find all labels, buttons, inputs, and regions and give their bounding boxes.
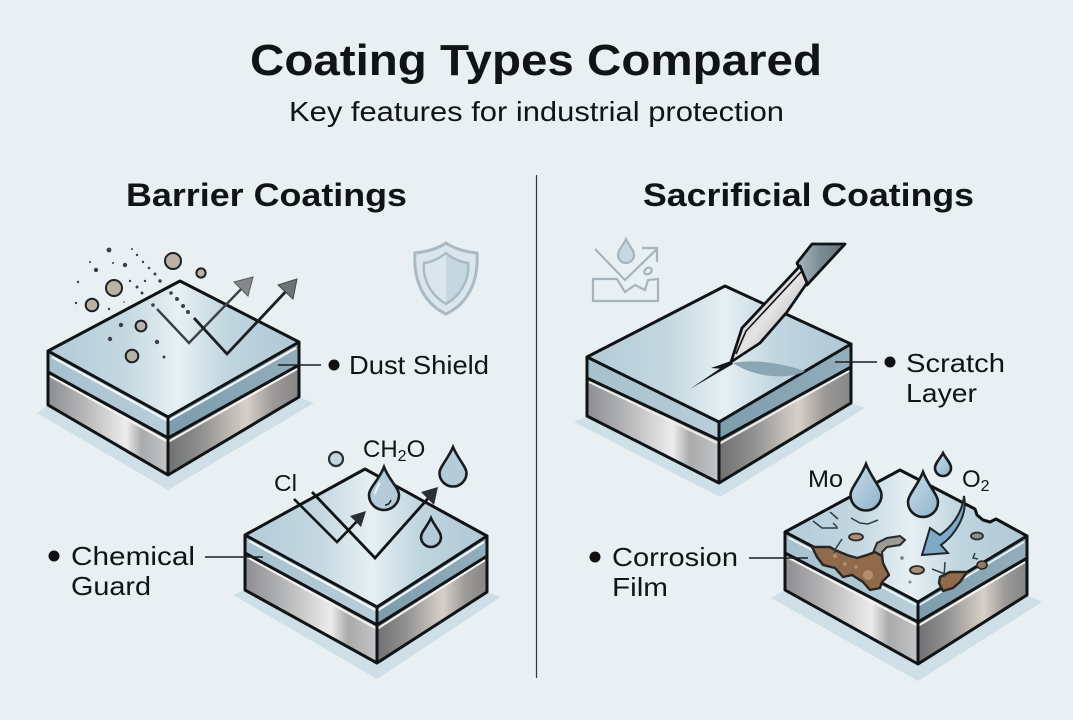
icon: water droplets — [850, 453, 951, 517]
arrow: chemical deflection, left — [294, 499, 366, 542]
dust particles — [75, 248, 206, 362]
label: Mo: Mo — [808, 466, 843, 493]
callout: dust shield — [278, 350, 489, 380]
label: CH2O: 2 — [398, 448, 407, 465]
callout: corrosion film: Film — [612, 572, 668, 602]
callout: scratch layer — [835, 348, 1005, 408]
heading: barrier coatings: Barrier Coatings — [126, 177, 407, 213]
callout: corrosion film: Corrosion — [612, 542, 738, 572]
panel: scratch layer block — [574, 286, 865, 497]
label: Cl: Cl — [274, 470, 297, 496]
callout: chemical guard: Chemical — [71, 541, 195, 571]
heading: sacrificial coatings: Sacrificial Coatings — [643, 177, 974, 213]
label: O2: O — [962, 466, 981, 493]
icon: corrosion surface — [593, 239, 658, 301]
icon: blade — [731, 244, 845, 362]
panel: corrosion film block — [771, 470, 1042, 681]
callout: dust shield: Dust Shield — [349, 350, 489, 380]
subtitle: Key features for industrial protection — [289, 96, 784, 127]
corrosion patches and cracks — [812, 512, 987, 591]
callout: corrosion film — [590, 542, 808, 602]
callout: scratch layer: Scratch — [906, 348, 1005, 378]
arrow: deflected dust, left — [157, 277, 253, 343]
arrow: deflected dust, right — [194, 279, 297, 354]
panel: dust shield block — [37, 281, 314, 490]
icon: shield — [415, 243, 477, 314]
arrow: oxygen attack — [922, 496, 965, 555]
title: Coating Types Compared — [250, 36, 822, 85]
label: O2: 2 — [981, 478, 990, 495]
label: CH2O: O — [407, 436, 425, 463]
label: CH2O: CH — [363, 436, 398, 463]
scratch mark and shadow — [690, 361, 805, 389]
panel: chemical guard block — [233, 469, 501, 679]
callout: chemical guard — [48, 541, 263, 601]
callout: scratch layer: Layer — [906, 378, 977, 408]
callout: chemical guard: Guard — [71, 571, 151, 601]
column divider — [536, 175, 538, 678]
arrow: chemical deflection, right — [312, 487, 438, 558]
icon: chemical droplets — [329, 447, 467, 547]
